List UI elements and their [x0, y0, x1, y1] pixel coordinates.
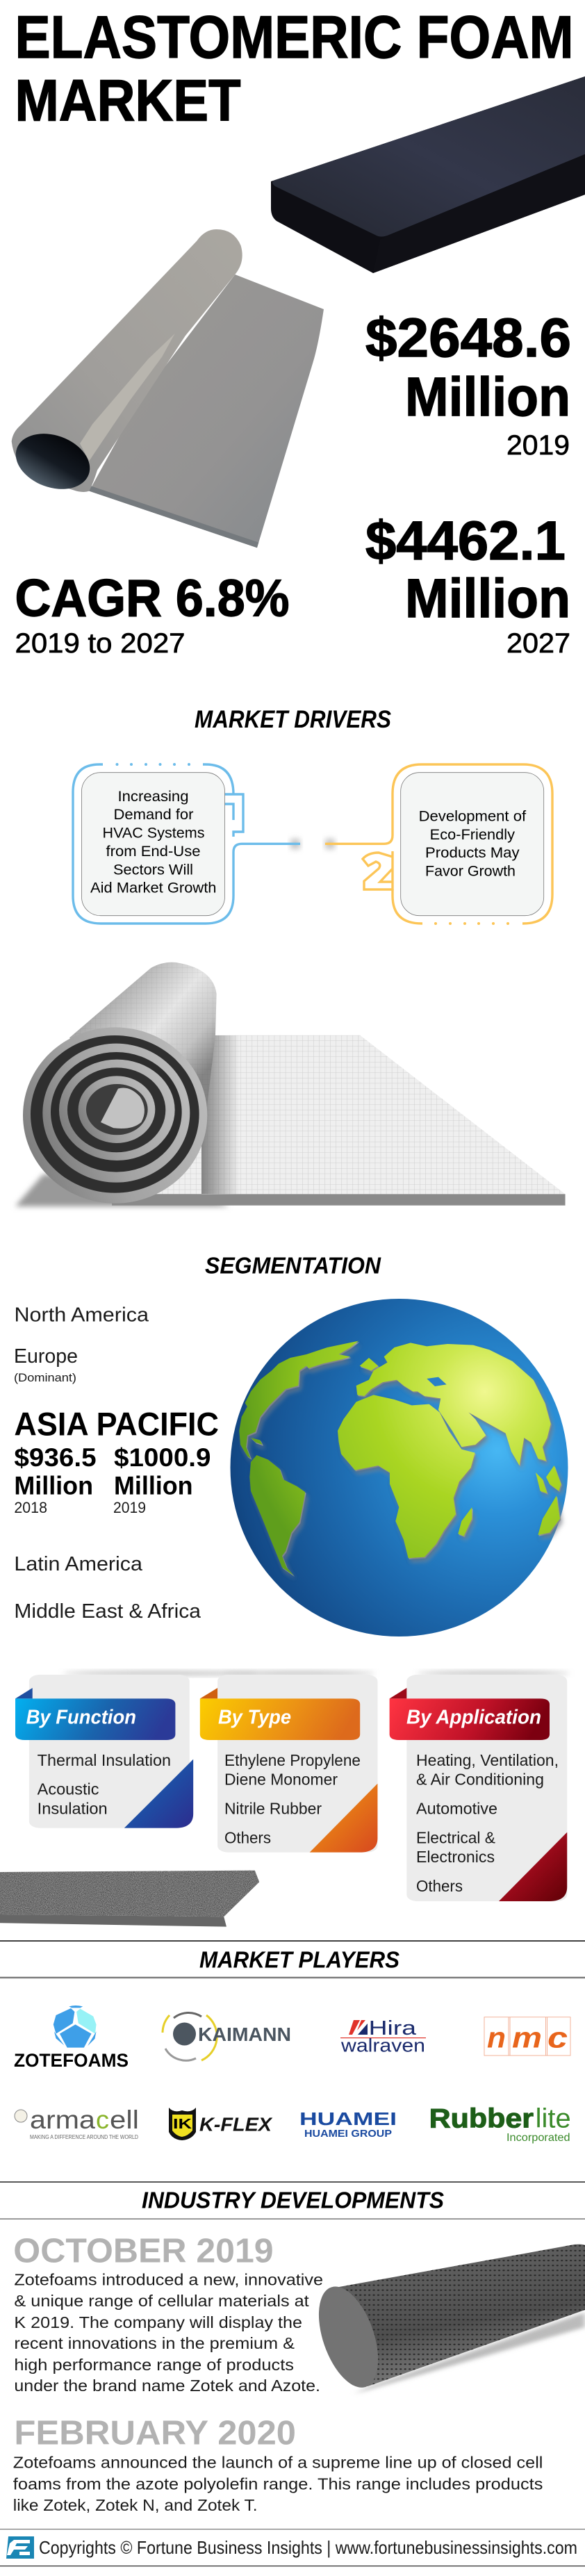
logo: nmc: c — [547, 2021, 568, 2054]
panel: by function: Thermal Insulation — [38, 1751, 171, 1769]
panel: driver 2 — [325, 764, 552, 925]
panel: by function: Acoustic — [38, 1780, 99, 1798]
logo: Rubberlite — [429, 2104, 571, 2144]
image: globe — [231, 1299, 568, 1636]
stat: 2019 market value: Million — [405, 366, 570, 427]
logo: Huamei: HUAMEI GROUP — [304, 2128, 392, 2140]
development: February 2020: like Zotek, Zotek N, and Zotek T. — [13, 2496, 258, 2514]
stat: 2027 market value: Million — [405, 567, 570, 629]
text: driver 1: Demand for — [114, 806, 193, 823]
regions list: Latin America — [14, 1553, 143, 1575]
icon: Fortune Business Insights logo — [6, 2536, 34, 2559]
development: October 2019: Zotefoams introduced a new, innovative — [14, 2271, 323, 2289]
panel: by function: Insulation — [38, 1800, 108, 1818]
panel: by application: Automotive — [416, 1800, 497, 1818]
logo: armacell: arma — [30, 2106, 95, 2134]
regions list: Middle East & Africa — [14, 1600, 201, 1623]
image: foam cylinder — [308, 2245, 585, 2394]
logo: Rubberlite: Incorporated — [506, 2132, 570, 2144]
development: February 2020: Zotefoams announced the launch of a supreme line up of closed cell — [13, 2453, 543, 2471]
panel: by application: Electronics — [416, 1848, 495, 1866]
text: driver 1: Aid Market Growth — [90, 880, 217, 896]
logo: Huamei: HUAMEI — [299, 2108, 397, 2129]
regions list — [14, 1304, 219, 1623]
text: driver 1: Increasing — [118, 788, 189, 805]
logo: Hira Walraven — [340, 2017, 426, 2056]
stat: CAGR: 2019 to 2027 — [15, 628, 185, 659]
text: driver 1: from End-Use — [106, 843, 200, 860]
panel: by application: Heating, Ventilation, — [416, 1751, 559, 1769]
regions list: $1000.9 — [114, 1443, 211, 1472]
panel: by type — [200, 1671, 377, 1853]
logo: Zotefoams: ZOTEFOAMS — [14, 2050, 129, 2071]
logo: nmc: m — [512, 2021, 542, 2054]
logo: armacell: ell — [110, 2106, 139, 2134]
panel: by type: By Type — [218, 1707, 291, 1729]
development: October 2019: under the brand name Zotek and Azote. — [14, 2377, 320, 2395]
title: MARKET — [15, 68, 240, 133]
text: driver 2 — [419, 808, 526, 880]
development: October 2019: high performance range of products — [14, 2356, 294, 2374]
text: driver 2: Favor Growth — [425, 863, 516, 880]
stat: 2019 market value: $2648.6 — [365, 306, 571, 368]
image: dark foam strip — [271, 76, 585, 273]
image: rolled foam mat — [15, 962, 566, 1206]
text: driver 2: Development of — [419, 808, 526, 825]
development: October 2019: OCTOBER 2019 — [13, 2232, 274, 2270]
development: February 2020: foams from the azote polyolefin range. This range includes products — [13, 2475, 543, 2493]
logo: Rubberlite: Rubber — [429, 2104, 534, 2134]
regions list: ASIA PACIFIC — [14, 1406, 219, 1443]
regions list: (Dominant) — [14, 1371, 76, 1384]
image: grey foam sheet roll — [8, 229, 324, 548]
title — [15, 4, 574, 133]
panel: by application: & Air Conditioning — [416, 1771, 544, 1789]
stat: 2027 market value: 2027 — [506, 628, 570, 659]
stat: 2027 market value: $4462.1 — [365, 509, 566, 571]
logo: Kaimann: KAIMANN — [198, 2024, 291, 2045]
stat: 2027 market value — [365, 509, 570, 659]
regions list: Million — [14, 1472, 93, 1500]
logo: armacell — [15, 2106, 139, 2140]
regions list: 2018 — [14, 1499, 47, 1516]
development: October 2019: K 2019. The company will display the — [14, 2313, 302, 2331]
logo: Rubberlite: lite — [536, 2104, 571, 2134]
development: October 2019 — [13, 2232, 323, 2395]
logo: nmc — [484, 2017, 570, 2056]
logo: Hira Walraven: walraven — [340, 2035, 425, 2056]
logo: K-Flex: K-FLEX — [199, 2114, 273, 2135]
text: driver 2: Products May — [425, 844, 520, 861]
regions list: North America — [14, 1304, 149, 1326]
stat: 2019 market value: 2019 — [506, 430, 570, 461]
panel: by function: By Function — [26, 1707, 136, 1729]
logo: Kaimann — [163, 2012, 291, 2060]
logo: Zotefoams — [14, 2005, 129, 2071]
text: driver 1 — [90, 788, 217, 896]
text: driver 1: HVAC Systems — [103, 825, 204, 842]
logo: Huamei — [299, 2108, 397, 2140]
image: grey foam strip — [0, 1871, 259, 1927]
heading: industry developments: INDUSTRY DEVELOPMENTS — [142, 2188, 444, 2213]
logo: K-Flex — [169, 2108, 273, 2140]
panel: by type: Diene Monomer — [224, 1771, 338, 1789]
panel: by application: Others — [416, 1877, 463, 1895]
heading: segmentation: SEGMENTATION — [205, 1253, 381, 1279]
regions list: Europe — [14, 1345, 78, 1368]
panel: driver 1 — [73, 763, 300, 924]
logo: armacell: MAKING A DIFFERENCE AROUND THE WORLD — [30, 2134, 138, 2140]
logo: nmc: n — [487, 2021, 506, 2054]
panel: by type: Ethylene Propylene — [224, 1751, 361, 1769]
stat: CAGR: CAGR 6.8% — [15, 568, 289, 627]
logo: armacell: c — [96, 2106, 109, 2134]
development: February 2020: FEBRUARY 2020 — [14, 2415, 296, 2452]
stat: CAGR — [15, 568, 289, 659]
development: October 2019: recent innovations in the premium & — [14, 2334, 295, 2352]
regions list: Million — [114, 1472, 193, 1500]
heading: market drivers: MARKET DRIVERS — [195, 706, 391, 733]
heading: market players: MARKET PLAYERS — [199, 1947, 399, 1973]
panel: by application: By Application — [406, 1707, 541, 1729]
panel: by type: Others — [224, 1828, 271, 1846]
text: driver 1: Sectors Will — [113, 862, 193, 878]
stat: 2019 market value — [365, 306, 571, 461]
panel: by function — [15, 1671, 257, 1828]
development: October 2019: & unique range of cellular materials at — [14, 2292, 309, 2310]
development: February 2020 — [13, 2415, 543, 2514]
logo: K-Flex: IK — [173, 2117, 192, 2132]
panel: by application: Electrical & — [416, 1828, 495, 1846]
regions list: 2019 — [113, 1499, 146, 1516]
panel: by type: Nitrile Rubber — [224, 1800, 322, 1818]
panel: by application — [390, 1671, 570, 1901]
logo: Hira Walraven: Hira — [369, 2017, 417, 2040]
text: driver 2: Eco-Friendly — [430, 826, 515, 843]
regions list: $936.5 — [14, 1443, 97, 1472]
